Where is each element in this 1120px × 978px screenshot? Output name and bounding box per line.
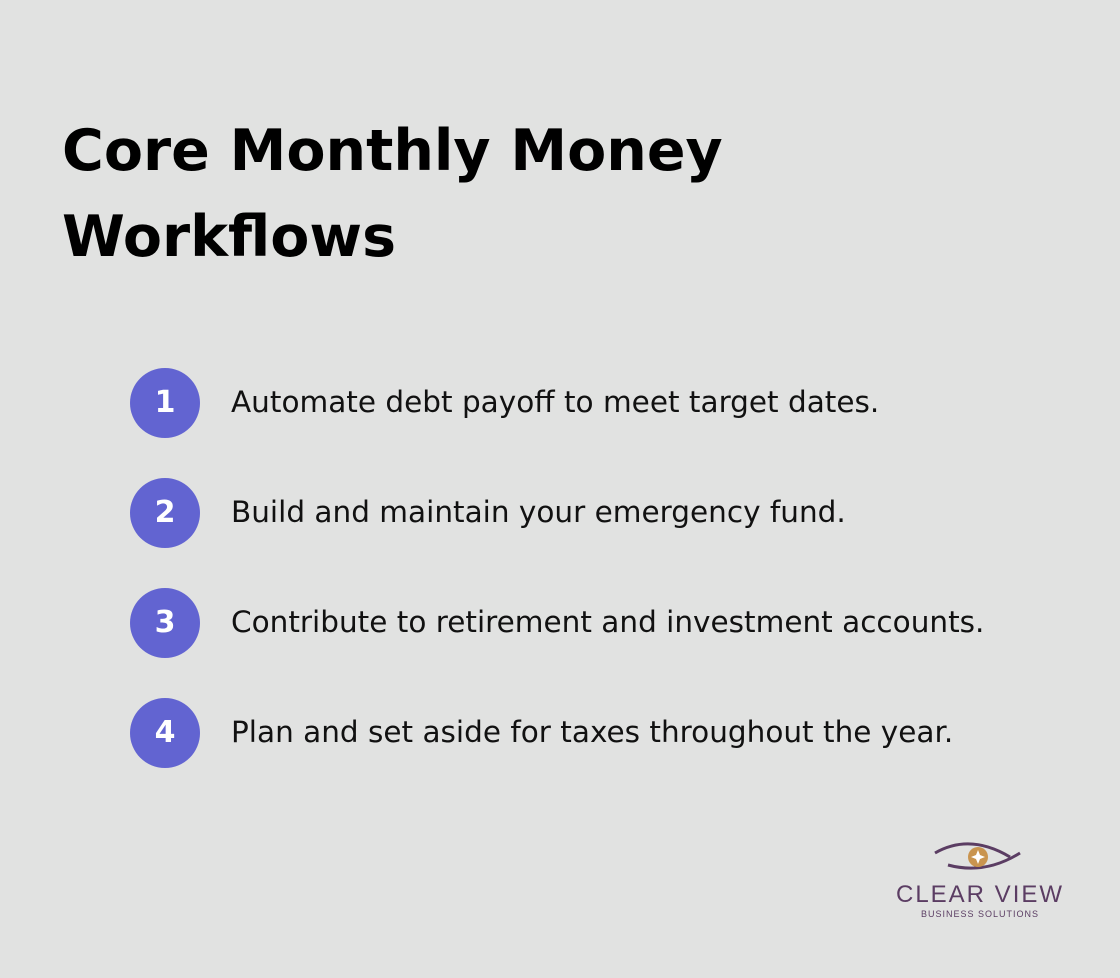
item 1 [130, 368, 879, 438]
title: Workflows [62, 204, 396, 270]
logo: CLEAR VIEW [896, 881, 1064, 908]
item 4: 4 [155, 715, 175, 750]
item 2 [130, 478, 846, 548]
item 1: Automate debt payoff to meet target dates. [231, 385, 879, 419]
logo: BUSINESS SOLUTIONS [921, 909, 1039, 919]
item 4 [130, 698, 953, 768]
item 3: 3 [155, 605, 175, 640]
logo [896, 842, 1064, 919]
item 3 [130, 588, 984, 658]
item 4: Plan and set aside for taxes throughout the year. [231, 715, 953, 749]
item 3: Contribute to retirement and investment accounts. [231, 605, 984, 639]
title [62, 118, 723, 270]
item 2: 2 [155, 495, 175, 530]
title: Core Monthly Money [62, 118, 723, 184]
item 1: 1 [155, 385, 175, 420]
item 2: Build and maintain your emergency fund. [231, 495, 846, 529]
